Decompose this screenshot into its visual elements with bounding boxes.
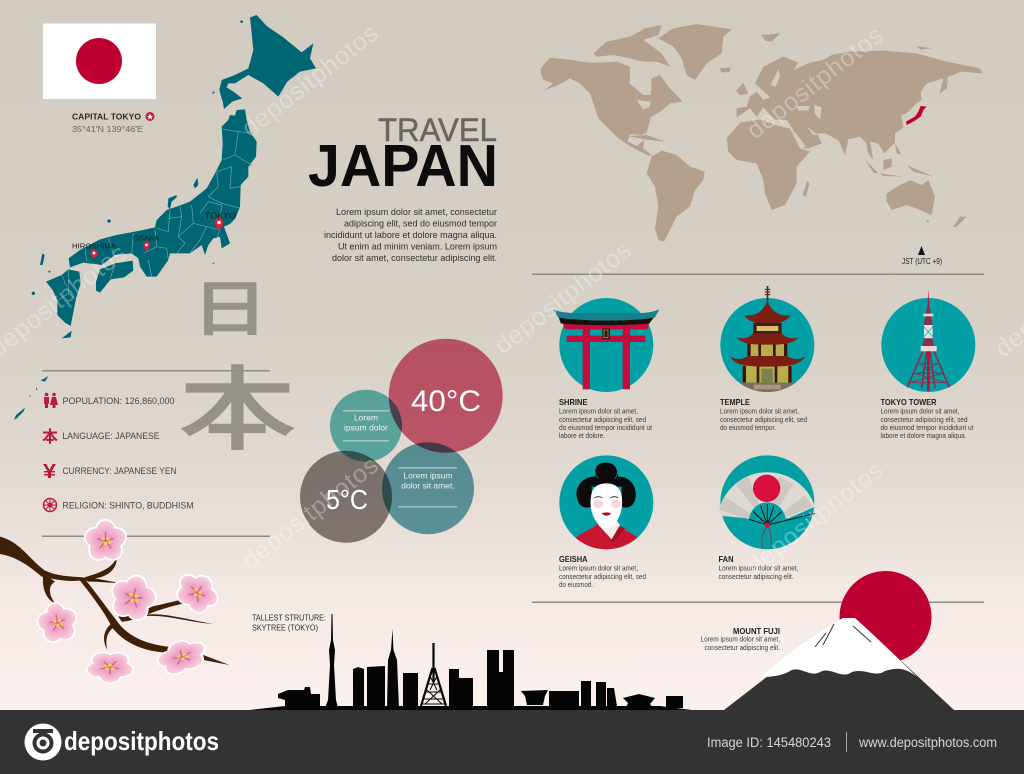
text: geisha bbox=[559, 554, 646, 589]
tallest structure label: SKYTREE (TOKYO) bbox=[252, 624, 318, 632]
text: geisha: GEISHA bbox=[559, 554, 588, 564]
text: shrine bbox=[559, 397, 653, 440]
text: shrine: do eiusmod tempor incididunt ut bbox=[559, 423, 653, 432]
rules bbox=[532, 274, 984, 275]
capital label: 35°41′N 139°46′E bbox=[72, 124, 143, 134]
bubble: small teal text: Lorem bbox=[354, 412, 378, 422]
text: fan: consectetur adipiscing elit. bbox=[718, 572, 794, 581]
footer logo bbox=[24, 724, 219, 760]
icon: tokyo tower bbox=[881, 289, 975, 392]
footer logo: depositphotos bbox=[64, 726, 219, 756]
watermarks: depositphotos bbox=[236, 19, 384, 143]
blossoms bbox=[31, 519, 229, 684]
title: TRAVEL bbox=[378, 112, 497, 148]
title: JAPAN bbox=[308, 133, 498, 199]
mount fuji text: consectetur adipiscing elit. bbox=[704, 643, 780, 652]
watermarks bbox=[0, 19, 1024, 580]
footer bar bbox=[0, 710, 1024, 774]
world map bbox=[541, 24, 982, 242]
icon: yen: ¥ bbox=[43, 461, 57, 483]
panel: tokyo tower bbox=[880, 289, 975, 440]
text: fan: Lorem ipsum dolor sit amet, bbox=[718, 564, 798, 572]
cherry blossom branch bbox=[0, 519, 229, 684]
text: fan: FAN bbox=[718, 554, 734, 564]
text: fan bbox=[718, 554, 798, 581]
tallest structure label bbox=[252, 614, 326, 632]
footer url: www.depositphotos.com bbox=[858, 735, 997, 750]
capital label bbox=[72, 112, 154, 134]
text: shrine: SHRINE bbox=[559, 397, 588, 407]
bubble: large teal text bbox=[398, 468, 457, 507]
icon: geisha bbox=[559, 455, 653, 553]
intro paragraph: Lorem ipsum dolor sit amet, consectetur bbox=[336, 207, 497, 218]
text: geisha: Lorem ipsum dolor sit amet, bbox=[559, 564, 638, 572]
japanese flag bbox=[43, 24, 156, 99]
mount fuji text: Lorem ipsum dolor sit amet, bbox=[700, 634, 780, 644]
text: temple bbox=[720, 397, 807, 432]
temperature bubbles bbox=[300, 339, 503, 543]
map of japan bbox=[14, 15, 316, 420]
mount fuji text: MOUNT FUJI bbox=[733, 626, 780, 636]
panel: temple bbox=[720, 286, 814, 432]
footer image id: Image ID: 145480243 bbox=[707, 735, 831, 750]
kanji nihon: 日 bbox=[193, 277, 267, 343]
bubble: small teal text: ipsum dolor bbox=[344, 422, 388, 432]
bubble: 40C: 40°C bbox=[411, 385, 481, 418]
text: shrine: consectetur adipiscing elit, sed bbox=[559, 415, 646, 424]
intro paragraph: incididunt ut labore et dolore magna aliqua. bbox=[324, 230, 497, 241]
city labels and pins: OSAKA bbox=[133, 234, 159, 242]
tallest structure label: TALLEST STRUTURE: bbox=[252, 614, 326, 622]
text: geisha: consectetur adipiscing elit, sed bbox=[559, 572, 646, 581]
tokyo skyline silhouette bbox=[250, 614, 692, 710]
facts list: CURRENCY: JAPANESE YEN bbox=[62, 466, 177, 477]
bubble: large teal text: dolor sit amet. bbox=[401, 480, 455, 490]
mount fuji illustration bbox=[724, 571, 954, 710]
text: temple: do eiusmod tempor. bbox=[720, 423, 776, 432]
intro paragraph bbox=[324, 207, 497, 264]
text: tokyo tower: TOKYO TOWER bbox=[880, 397, 936, 407]
panel: fan bbox=[718, 455, 815, 581]
icon: language: 本 bbox=[42, 428, 58, 446]
city labels and pins bbox=[72, 212, 236, 259]
icon: people bbox=[44, 393, 58, 408]
time zone marker: JST (UTC +9) bbox=[902, 257, 942, 266]
icon: pagoda bbox=[720, 286, 814, 393]
bubble: 5C: 5°C bbox=[326, 484, 368, 515]
japan highlighted bbox=[906, 106, 927, 125]
text: tokyo tower: Lorem ipsum dolor sit amet, bbox=[880, 406, 960, 416]
facts list: RELIGION: SHINTO, BUDDHISM bbox=[62, 500, 194, 512]
text: tokyo tower: labore et dolore magna aliqua. bbox=[880, 431, 966, 440]
city labels and pins: HIROSHIMA bbox=[72, 242, 116, 250]
watermarks: depositphotos bbox=[489, 236, 637, 360]
text: tokyo tower bbox=[880, 397, 974, 440]
icon: dharma wheel bbox=[43, 498, 57, 512]
kanji nihon: 本 bbox=[180, 359, 295, 460]
panel: shrine bbox=[553, 298, 659, 440]
text: shrine: Lorem ipsum dolor sit amet, bbox=[559, 406, 638, 416]
text: temple: TEMPLE bbox=[720, 397, 750, 407]
bubble: large teal text: Lorem ipsum bbox=[403, 470, 453, 480]
intro paragraph: Ut enim ad minim veniam. Lorem ipsum bbox=[338, 242, 497, 252]
intro paragraph: dolor sit amet, consectetur adipiscing elit. bbox=[332, 253, 497, 264]
kanji nihon bbox=[180, 277, 295, 460]
text: tokyo tower: consectetur adipiscing elit, sed bbox=[880, 415, 968, 424]
icon: folding fan bbox=[719, 455, 815, 549]
facts list bbox=[42, 393, 194, 512]
time zone marker bbox=[902, 246, 942, 266]
bubble: small teal text bbox=[343, 410, 389, 441]
text: tokyo tower: do eiusmod tempor incididunt ut bbox=[880, 423, 974, 432]
facts list: POPULATION: 126,860,000 bbox=[62, 396, 174, 407]
watermarks: depositphotos bbox=[236, 451, 384, 575]
text: temple: consectetur adipiscing elit, sed bbox=[720, 415, 807, 424]
icon: torii gate bbox=[553, 298, 659, 392]
panel: geisha bbox=[559, 455, 653, 589]
watermarks: depositphotos bbox=[741, 21, 889, 145]
text: geisha: do eiusmod. bbox=[559, 580, 593, 589]
okinawa islands bbox=[14, 376, 48, 420]
watermarks: depositphotos bbox=[741, 456, 889, 580]
facts list: LANGUAGE: JAPANESE bbox=[62, 431, 160, 442]
text: temple: Lorem ipsum dolor sit amet, bbox=[720, 406, 799, 416]
capital label: CAPITAL TOKYO bbox=[72, 112, 141, 122]
mount fuji text bbox=[700, 626, 780, 652]
text: shrine: labore et dolore. bbox=[559, 431, 605, 440]
intro paragraph: adipiscing elit, sed do eiusmod tempor bbox=[344, 218, 497, 230]
city labels and pins: TOKYO bbox=[205, 212, 236, 220]
